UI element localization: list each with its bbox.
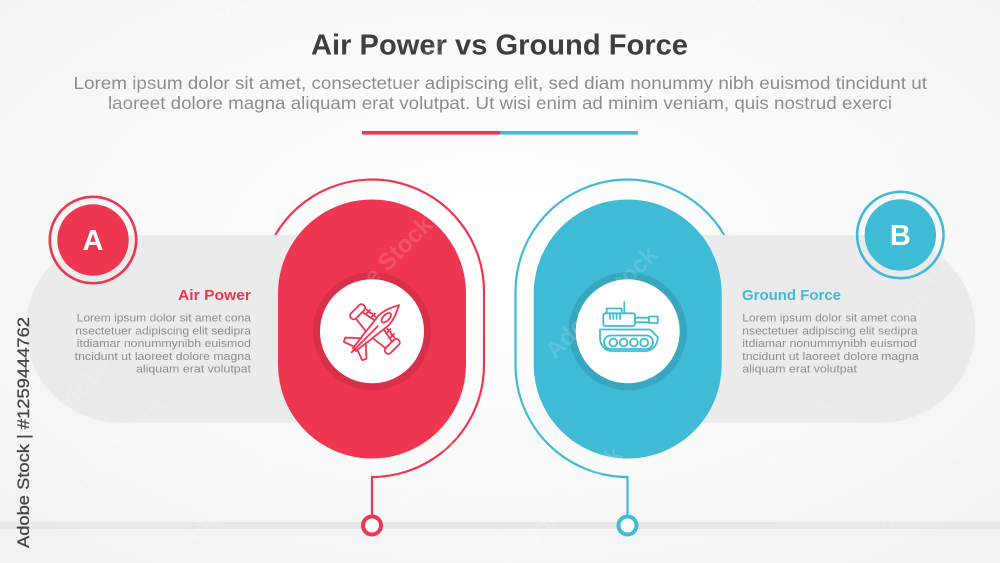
badge A: A bbox=[83, 225, 104, 257]
title: Air Power vs Ground Force bbox=[311, 30, 688, 62]
panel: air power band bbox=[26, 235, 330, 422]
icon: tank bbox=[600, 302, 658, 351]
panel: ground force band bbox=[670, 235, 975, 422]
watermark pattern: Adobe Stock bbox=[865, 231, 988, 354]
watermark pattern: Adobe Stock bbox=[850, 441, 973, 563]
badge A bbox=[50, 197, 136, 283]
header divider bbox=[362, 131, 638, 135]
watermark pattern: Adobe Stock bbox=[380, 401, 503, 524]
watermark pattern: Adobe Stock bbox=[715, 391, 838, 514]
air power pill bbox=[278, 200, 466, 458]
air power icon disc bbox=[313, 272, 431, 390]
ground force text: aliquam erat volutpat bbox=[742, 364, 857, 376]
ground force text: itdiamar nonummynibh euismod bbox=[742, 338, 917, 350]
air power text: aliquam erat volutpat bbox=[136, 364, 251, 376]
ground force pill bbox=[534, 200, 722, 458]
ground force text: Lorem ipsum dolor sit amet cona bbox=[742, 313, 918, 325]
stock id label: Adobe Stock | #1259444762 bbox=[14, 317, 33, 548]
air power text: nsectetuer adipiscing elit sedipra bbox=[75, 325, 252, 337]
description: laoreet dolore magna aliquam erat volutpat. Ut wisi enim ad minim veniam, quis nostrud exerci bbox=[108, 93, 892, 113]
ground force icon disc bbox=[569, 272, 687, 390]
description bbox=[74, 73, 927, 113]
watermark pattern: Adobe Stock bbox=[40, 61, 163, 184]
air power text: tncidunt ut laoreet dolore magna bbox=[75, 351, 252, 363]
ground force text: Ground Force bbox=[742, 287, 841, 304]
air power text bbox=[75, 287, 252, 376]
air power text: itdiamar nonummynibh euismod bbox=[77, 338, 251, 350]
air power text: Air Power bbox=[178, 287, 251, 304]
watermark pattern: Adobe Stock bbox=[540, 241, 663, 364]
air power text: Lorem ipsum dolor sit amet cona bbox=[77, 313, 252, 325]
ground force text: tncidunt ut laoreet dolore magna bbox=[742, 351, 920, 363]
watermark pattern: Adobe Stock bbox=[175, 431, 298, 554]
air power outline connector bbox=[275, 180, 484, 535]
description: Lorem ipsum dolor sit amet, consectetuer adipiscing elit, sed diam nonummy nibh euismod tincidunt ut bbox=[74, 73, 927, 93]
watermark pattern: Adobe Stock bbox=[45, 301, 168, 424]
badge B bbox=[857, 192, 944, 278]
icon: fighter jet bbox=[332, 285, 419, 372]
badge B: B bbox=[890, 220, 911, 252]
ground force text: nsectetuer adipiscing elit sedipra bbox=[742, 325, 919, 337]
ground force outline connector bbox=[516, 180, 724, 534]
watermark pattern: Adobe Stock bbox=[165, 101, 288, 224]
watermark pattern: Adobe Stock bbox=[705, 76, 828, 199]
bottom timeline bar bbox=[0, 522, 1000, 529]
watermark pattern: Adobe Stock bbox=[505, 441, 628, 563]
watermark pattern: Adobe Stock bbox=[315, 211, 438, 334]
watermark pattern: Adobe Stock bbox=[845, 71, 968, 194]
ground force text bbox=[742, 287, 920, 376]
watermark pattern: Adobe Stock bbox=[50, 391, 173, 514]
